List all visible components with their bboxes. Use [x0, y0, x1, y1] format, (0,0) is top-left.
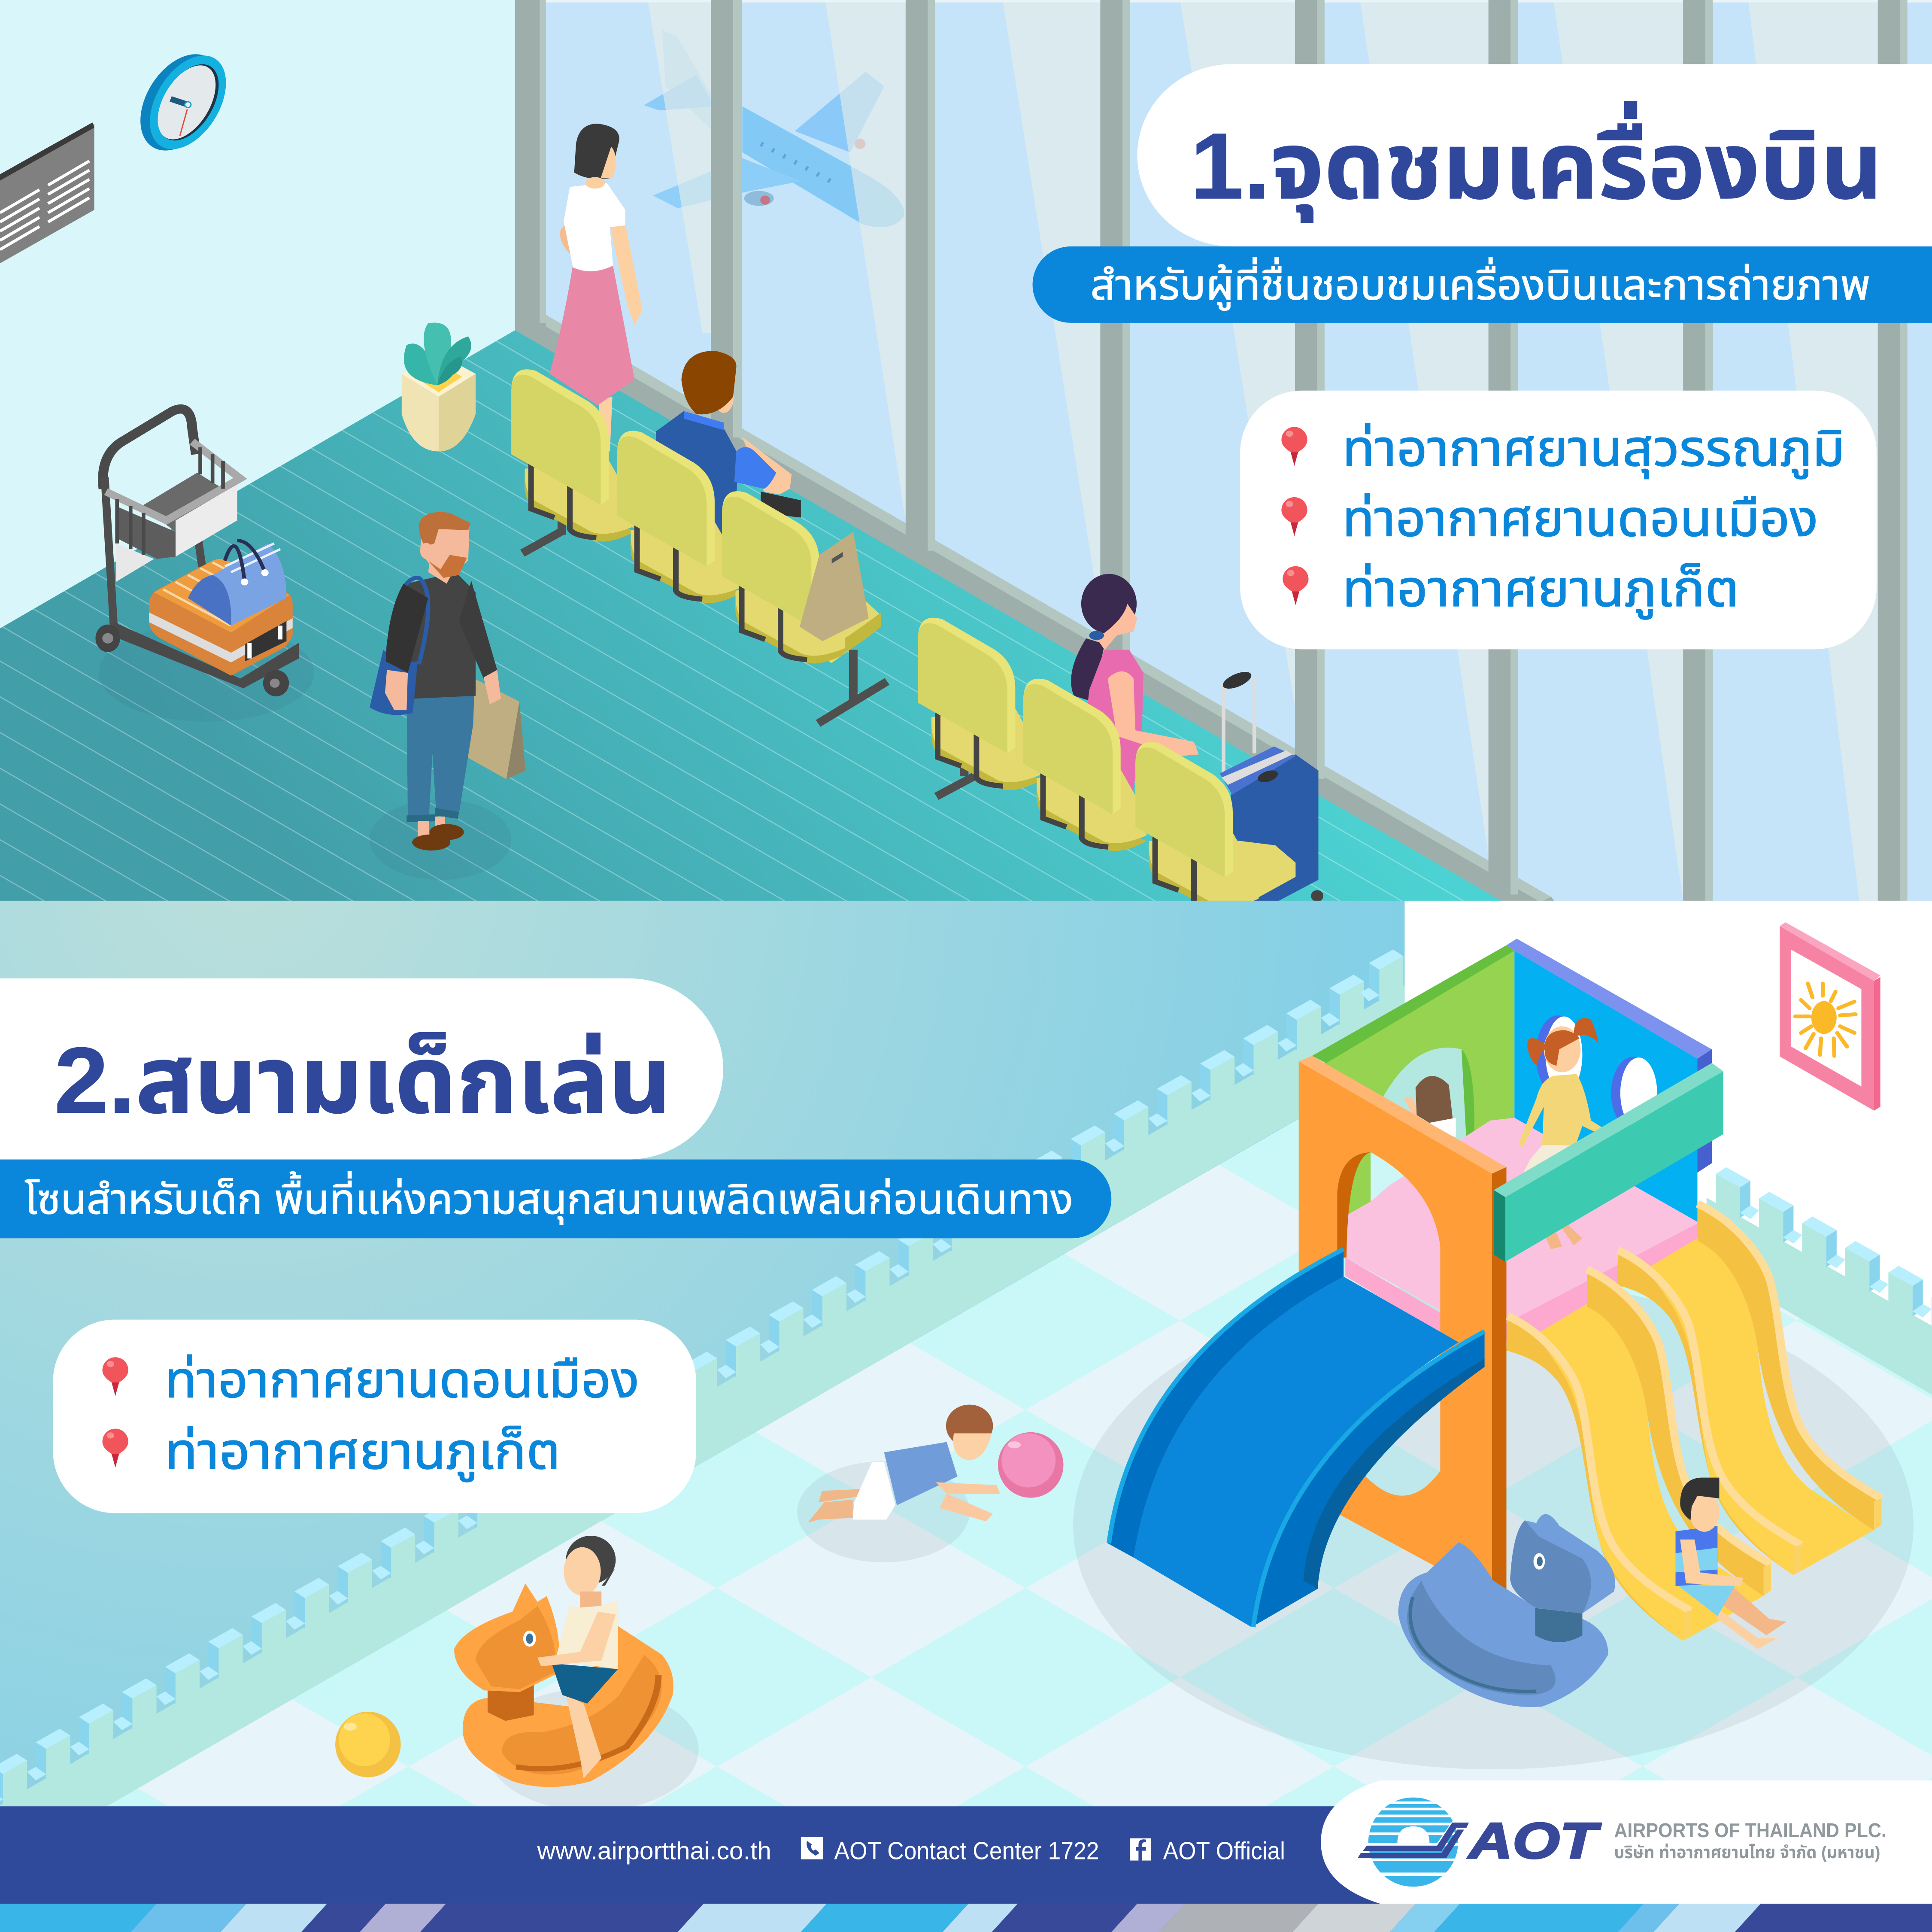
company name English: AIRPORTS OF THAILAND PLC. — [1614, 1819, 1887, 1841]
wall fence with crenellations, right — [1707, 1167, 1932, 1395]
blue rolling suitcase — [1220, 668, 1323, 902]
panel 1: airport list — [1240, 391, 1877, 649]
pin icon — [1281, 427, 1307, 466]
airport name: ท่าอากาศยานภูเก็ต — [165, 1423, 561, 1482]
person: seated man — [653, 351, 801, 572]
yellow ball — [335, 1712, 401, 1777]
seat extension end of row — [736, 592, 881, 663]
yellow slides — [1506, 1204, 1881, 1641]
person: woman with ponytail seated — [1071, 574, 1199, 817]
teal railing — [1494, 1063, 1723, 1262]
heading 1: 1.จุดชมเครื่องบิน — [1190, 101, 1883, 223]
panel 1: title pill — [1137, 64, 1932, 246]
child: girl with pigtails — [1519, 1018, 1604, 1249]
contact center: AOT Contact Center 1722 — [834, 1838, 1099, 1865]
glass reflections — [648, 3, 1878, 901]
floor: teal striped — [0, 330, 1503, 902]
facebook name: AOT Official — [1163, 1838, 1285, 1865]
crawling child and pink ball — [808, 1405, 1064, 1522]
window frame columns and sill — [515, 0, 1908, 902]
child sitting on yellow slide — [1676, 1478, 1786, 1649]
background: upper terminal scene — [0, 0, 1932, 902]
orange suitcase — [149, 559, 293, 676]
airport name: ท่าอากาศยานดอนเมือง — [165, 1351, 639, 1408]
shopping bag — [465, 678, 525, 779]
bottom stripes — [0, 1904, 1932, 1932]
person: standing man with bags — [370, 512, 525, 880]
playroom floor — [0, 1073, 1932, 1868]
child rider — [537, 1536, 618, 1778]
orange front panel of tower — [1299, 1056, 1723, 1597]
paper bag on seat — [800, 532, 869, 641]
floor shadows — [487, 1282, 1914, 1811]
company name Thai: บริษัท ท่าอากาศยานไทย จำกัด (มหาชน) — [1614, 1843, 1880, 1862]
AOT emblem — [1358, 1798, 1469, 1887]
playground tower back walls — [1312, 939, 1712, 1334]
footer band — [0, 1806, 1932, 1904]
seats: second row — [918, 618, 1295, 914]
icon: wall clock — [124, 42, 242, 163]
icon: wall vent — [0, 122, 94, 263]
pin icon — [1283, 566, 1309, 605]
icon: airplane behind glass — [644, 30, 904, 227]
airport name: ท่าอากาศยานภูเก็ต — [1342, 560, 1739, 620]
panel 1: subtitle bar — [1033, 246, 1932, 323]
heading 2: 2.สนามเด็กเล่น — [54, 1029, 671, 1133]
logo panel — [1321, 1780, 1932, 1904]
airport name: ท่าอากาศยานดอนเมือง — [1342, 490, 1818, 547]
shoulder bag — [370, 578, 428, 715]
icon: phone — [801, 1837, 823, 1859]
child: back view — [1404, 1076, 1456, 1137]
picture frame with sun — [1780, 922, 1880, 1111]
seat extension end of row — [1151, 834, 1295, 902]
icon: facebook — [1130, 1838, 1151, 1861]
pin icon — [103, 1429, 128, 1467]
pin icon — [1281, 497, 1307, 536]
pink ball — [998, 1432, 1064, 1498]
plant pot — [402, 322, 476, 451]
blue duffel bag — [188, 541, 286, 626]
orange rocking horse with child — [335, 1536, 673, 1787]
panel 2: title pill — [0, 978, 723, 1160]
pin icon — [103, 1357, 128, 1396]
person: woman by window — [549, 124, 643, 451]
luggage cart — [95, 409, 314, 722]
seats: first row — [511, 369, 887, 723]
panel 2: subtitle bar — [0, 1160, 1111, 1238]
website: www.airportthai.co.th — [537, 1838, 771, 1865]
background: lower playroom wall — [0, 901, 1932, 1807]
subtitle text 1: สำหรับผู้ที่ชื่นชอบชมเครื่องบินและการถ่ายภาพ — [1090, 257, 1870, 310]
airport name: ท่าอากาศยานสุวรรณภูมิ — [1342, 420, 1845, 479]
blue slide — [1108, 1249, 1485, 1627]
blue rocking horse — [1398, 1514, 1615, 1707]
subtitle text 2: โซนสำหรับเด็ก พื้นที่แห่งความสนุกสนานเพลิดเพลินก่อนเดินทาง — [24, 1171, 1073, 1225]
AOT wordmark: AOT — [1467, 1812, 1601, 1869]
wall fence with crenellations, left — [0, 950, 1404, 1868]
panel 2: airport list — [53, 1320, 696, 1513]
